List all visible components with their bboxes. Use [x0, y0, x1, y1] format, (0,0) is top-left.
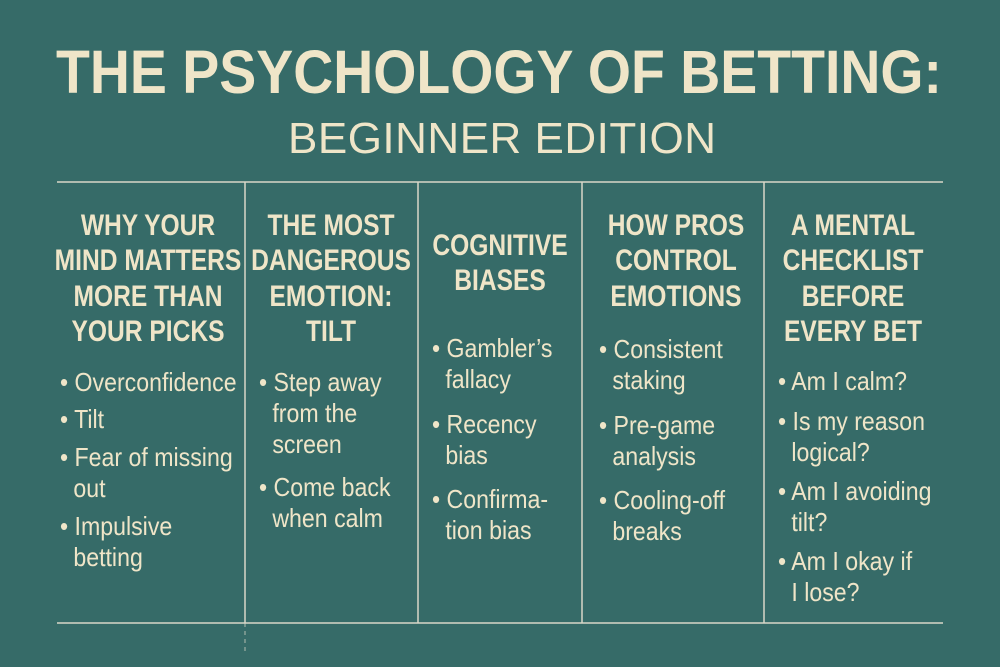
heading: col2: EMOTION: [270, 279, 392, 313]
bullets: col1: • Tilt [60, 406, 104, 434]
bullets: col1: betting [73, 544, 143, 572]
bullets: col4: • Consistent [599, 336, 723, 364]
heading: col3: COGNITIVE [432, 228, 568, 262]
heading: col4: HOW PROS [608, 208, 744, 242]
bullets: col4: breaks [612, 518, 682, 546]
bullets: col5: • Am I okay if [778, 548, 912, 576]
heading: col5: A MENTAL [791, 208, 915, 242]
panel: why your mind matters [55, 208, 241, 572]
bullets: col5: • Am I calm? [778, 368, 907, 396]
heading: col1: MIND MATTERS [55, 243, 241, 277]
panel: tilt [251, 208, 411, 533]
panel: mental checklist [778, 208, 931, 607]
bullets: col4: • Pre-game [599, 412, 715, 440]
heading: col4: CONTROL [615, 243, 737, 277]
bullets: col5: • Am I avoiding [778, 478, 931, 506]
heading: col5: BEFORE [802, 279, 904, 313]
bullets: col5: tilt? [791, 509, 827, 537]
bullets: col5: logical? [791, 439, 870, 467]
bullets: col3: tion bias [445, 517, 532, 545]
bullets: col4: • Cooling-off [599, 487, 725, 515]
bullets: col1: • Impulsive [60, 513, 172, 541]
heading: col3: BIASES [454, 263, 546, 297]
heading: col2: THE MOST [267, 208, 395, 242]
heading: col1: YOUR PICKS [71, 314, 225, 348]
bullets: col1: • Overconfidence [60, 369, 237, 397]
heading: col4: EMOTIONS [610, 279, 742, 313]
bullets: col5: • Is my reason [778, 408, 925, 436]
bullets: col2: • Step away [259, 369, 382, 397]
heading: col2: TILT [306, 314, 356, 348]
bullets: col3: • Confirma- [432, 486, 548, 514]
bullets: col2: screen [272, 431, 342, 459]
subtitle: BEGINNER EDITION [288, 114, 716, 163]
heading: col1: WHY YOUR [81, 208, 215, 242]
bullets: col2: from the [272, 400, 357, 428]
heading: col5: CHECKLIST [783, 243, 924, 277]
bullets: col3: fallacy [445, 366, 512, 394]
bullets: col3: bias [445, 442, 488, 470]
bullets: col3: • Gambler’s [432, 335, 552, 363]
bullets: col2: • Come back [259, 474, 391, 502]
bullets: col4: staking [612, 367, 686, 395]
heading: col1: MORE THAN [74, 279, 222, 313]
bullets: col1: out [73, 475, 106, 503]
heading: col2: DANGEROUS [251, 243, 411, 277]
bullets: col2: when calm [271, 505, 383, 533]
bullets: col4: analysis [612, 443, 696, 471]
panel: pros control emotions [599, 208, 744, 546]
heading: col5: EVERY BET [784, 314, 922, 348]
bullets: col3: • Recency [432, 411, 537, 439]
bullets: col5: I lose? [791, 579, 860, 607]
bullets: col1: • Fear of missing [60, 444, 233, 472]
panel: cognitive biases [432, 228, 568, 545]
